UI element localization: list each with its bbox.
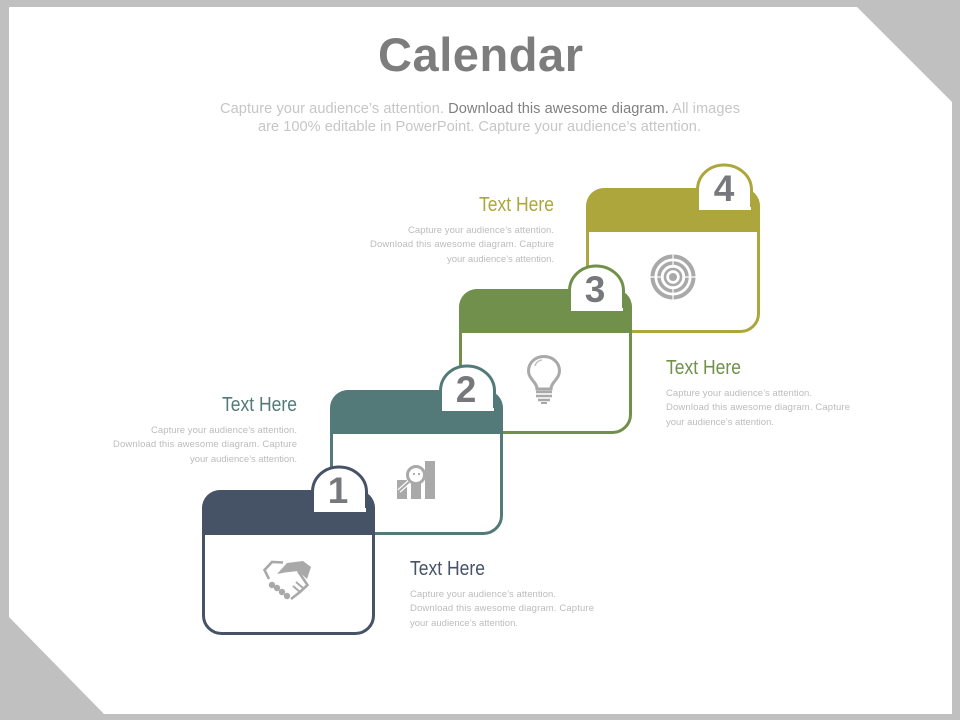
icon: handshake — [264, 561, 311, 599]
text block 3: Download this awesome diagram. Capture — [666, 402, 850, 413]
text block 2: Capture your audience’s attention. — [151, 425, 297, 436]
icon: target — [649, 253, 697, 301]
subtitle: are 100% editable in PowerPoint. Capture your audience’s attention. — [258, 119, 701, 135]
calendar card 2 — [330, 366, 503, 534]
text block 2 — [113, 394, 297, 465]
subtitle: Capture your audience’s attention. Download this awesome diagram. All images — [220, 101, 740, 117]
text block 2: your audience’s attention. — [190, 454, 297, 465]
text block 1: Capture your audience’s attention. — [410, 589, 556, 600]
text block 4 — [370, 194, 554, 265]
text block 4: your audience’s attention. — [447, 254, 554, 265]
text block 3: Capture your audience’s attention. — [666, 388, 812, 399]
calendar card 4 — [586, 165, 760, 332]
calendar card 3 — [459, 266, 632, 432]
text block 3 — [666, 357, 850, 428]
text block 1 — [410, 558, 594, 629]
icon: chart with magnifier — [397, 461, 435, 499]
text block 1: your audience’s attention. — [410, 618, 518, 629]
text block 4: Text Here — [479, 194, 554, 216]
text block 2: Download this awesome diagram. Capture — [113, 439, 297, 450]
text block 2: Text Here — [222, 394, 297, 416]
text block 4: Download this awesome diagram. Capture — [370, 239, 554, 250]
number 4: 4 — [714, 168, 735, 209]
text block 3: Text Here — [666, 357, 741, 379]
text block 1: Download this awesome diagram. Capture — [410, 603, 594, 614]
text block 4: Capture your audience’s attention. — [408, 225, 554, 236]
text block 1: Text Here — [410, 558, 485, 580]
text block 3: your audience’s attention. — [666, 417, 774, 428]
subtitle — [220, 101, 740, 135]
icon: light bulb — [528, 356, 560, 403]
number 3: 3 — [585, 269, 605, 310]
calendar card 1 — [202, 467, 375, 634]
number 1: 1 — [328, 470, 348, 511]
title: Calendar — [378, 28, 583, 81]
number 2: 2 — [456, 369, 476, 410]
